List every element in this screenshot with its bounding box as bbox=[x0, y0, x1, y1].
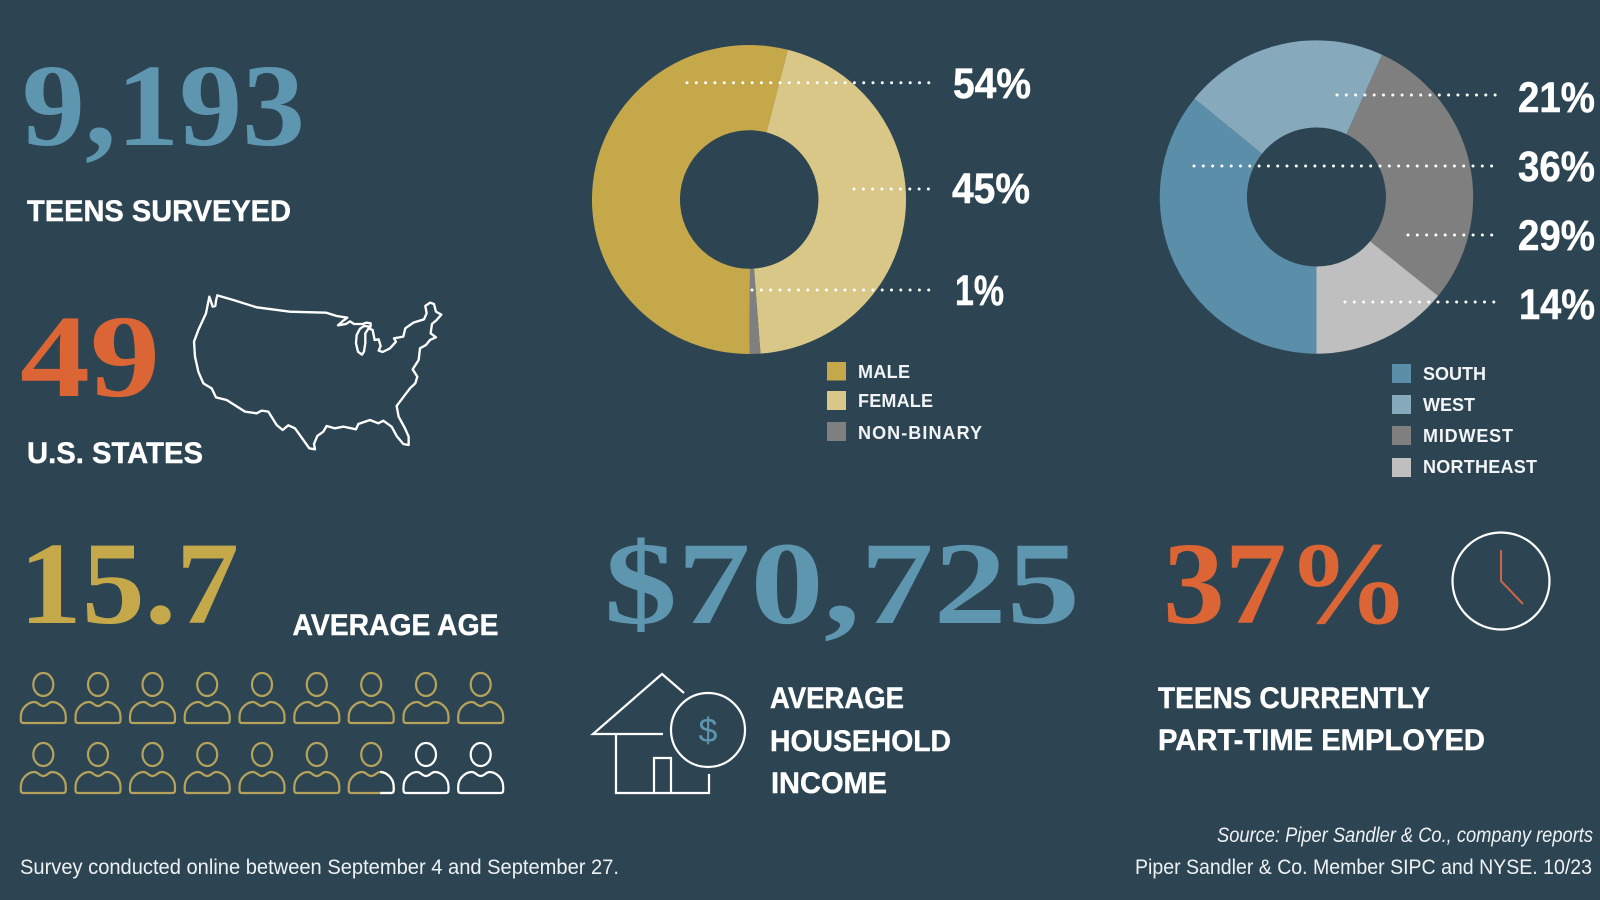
number: 37%: 37% bbox=[1163, 518, 1410, 649]
legend label: non-binary: NON-BINARY bbox=[858, 423, 982, 443]
segment: west bbox=[1194, 40, 1382, 154]
segment: male bbox=[592, 45, 788, 354]
number: 9,193: 9,193 bbox=[22, 40, 305, 171]
legend: gender bbox=[827, 362, 982, 443]
swatch: northeast bbox=[1392, 458, 1411, 477]
label: average age: AVERAGE AGE bbox=[292, 609, 498, 642]
label: U.S. states: U.S. STATES bbox=[27, 437, 203, 470]
label: teens surveyed: TEENS SURVEYED bbox=[27, 195, 291, 228]
segment: female bbox=[754, 50, 906, 354]
label: teens currently part-time employed: TEENS CURRENTLY bbox=[1158, 682, 1430, 715]
segment: non-binary bbox=[750, 269, 760, 354]
segment: south bbox=[1160, 99, 1316, 354]
stat: average age bbox=[19, 518, 498, 649]
icon: house with dollar coin: $ bbox=[699, 712, 718, 750]
legend label: male: MALE bbox=[858, 362, 910, 382]
leader line: 45% bbox=[854, 188, 932, 190]
leader line: 14% bbox=[1345, 300, 1497, 304]
legend label: west: WEST bbox=[1423, 395, 1475, 415]
stat: part-time employed bbox=[1158, 518, 1550, 757]
swatch: west bbox=[1392, 395, 1411, 414]
number: 15.7: 15.7 bbox=[19, 518, 239, 649]
label: average household income: HOUSEHOLD bbox=[770, 725, 951, 758]
value: 54%: 54% bbox=[953, 60, 1031, 108]
legend: region bbox=[1392, 364, 1537, 477]
footnote: survey dates: Survey conducted online between September 4 and September 27. bbox=[20, 856, 619, 879]
leader line: 29% bbox=[1408, 234, 1497, 236]
number: $70,725: $70,725 bbox=[604, 518, 1080, 649]
swatch: south bbox=[1392, 364, 1411, 383]
icon: house with dollar coin bbox=[593, 674, 745, 793]
value: 1%: 1% bbox=[955, 267, 1004, 315]
label: average household income: AVERAGE bbox=[770, 682, 904, 715]
swatch: female bbox=[827, 391, 846, 410]
legend label: female: FEMALE bbox=[858, 391, 933, 411]
segment: midwest bbox=[1346, 55, 1473, 296]
legend label: south: SOUTH bbox=[1423, 364, 1486, 384]
swatch: non-binary bbox=[827, 422, 846, 441]
legend label: midwest: MIDWEST bbox=[1423, 426, 1513, 446]
swatch: male bbox=[827, 362, 846, 380]
pictogram: 16 of 18 gold people icons showing average age bbox=[21, 673, 503, 793]
leader line: 21% bbox=[1337, 94, 1497, 96]
chart: gender donut bbox=[592, 45, 1031, 354]
leader line: 1% bbox=[752, 288, 932, 292]
segment: northeast bbox=[1316, 241, 1438, 354]
icon: clock bbox=[1452, 532, 1550, 630]
stat: teens surveyed bbox=[22, 40, 305, 228]
stat: U.S. states bbox=[20, 291, 441, 470]
leader line: 36% bbox=[1194, 164, 1497, 168]
label: teens currently part-time employed: PART-TIME EMPLOYED bbox=[1158, 724, 1485, 757]
number: 49: 49 bbox=[20, 291, 160, 422]
stat: average household income bbox=[593, 518, 1080, 800]
label: average household income bbox=[770, 682, 951, 800]
value: 45%: 45% bbox=[952, 165, 1030, 213]
swatch: midwest bbox=[1392, 426, 1411, 445]
leader line: 54% bbox=[687, 81, 932, 84]
chart: region donut bbox=[1160, 40, 1595, 354]
legend label: northeast: NORTHEAST bbox=[1423, 457, 1537, 477]
label: average household income: INCOME bbox=[771, 767, 887, 800]
icon: map of the United States bbox=[194, 295, 441, 449]
label: teens currently part-time employed bbox=[1158, 682, 1485, 757]
